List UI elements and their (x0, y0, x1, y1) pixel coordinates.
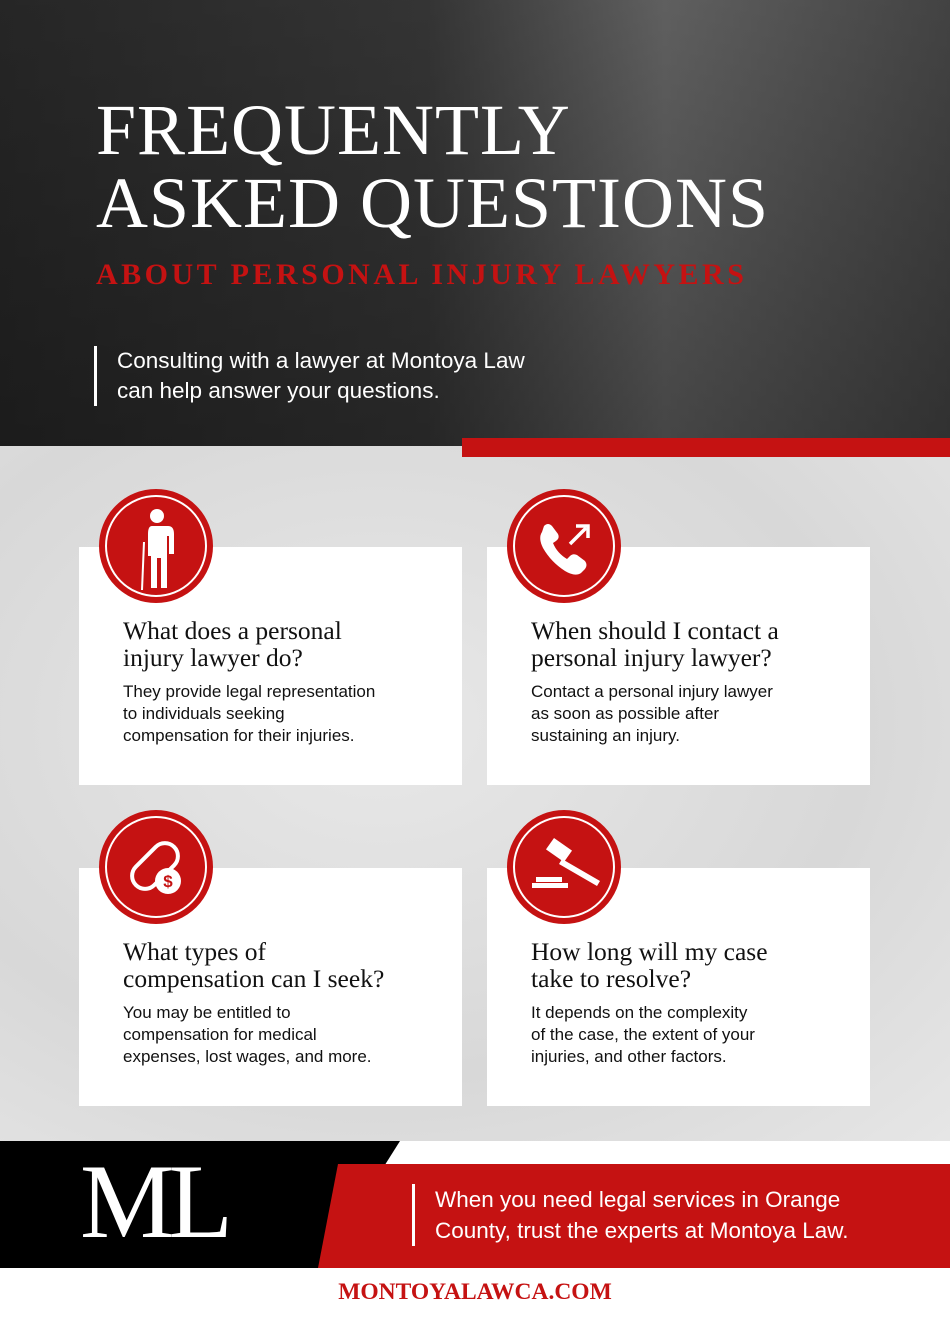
header photo background (0, 0, 950, 446)
footer black logo block (0, 1141, 400, 1268)
card 4: take to resolve? (531, 964, 691, 993)
red accent bar (462, 438, 950, 457)
icon: gavel (507, 810, 621, 924)
title (96, 90, 769, 243)
icon: pill with dollar (99, 810, 213, 924)
card 3: You may be entitled to (123, 1003, 291, 1022)
card 1: compensation for their injuries. (123, 726, 355, 745)
card 2: Contact a personal injury lawyer (531, 682, 773, 701)
card 4: How long will my case (531, 937, 768, 966)
footer red band (318, 1164, 950, 1268)
title: ASKED QUESTIONS (96, 163, 769, 243)
card 1: What does a personal (123, 616, 342, 645)
card 2: as soon as possible after (531, 704, 719, 723)
body background (0, 446, 950, 1141)
card 2: personal injury lawyer? (531, 643, 772, 672)
card 4: injuries, and other factors. (531, 1047, 727, 1066)
title: FREQUENTLY (96, 90, 571, 170)
card 3: What types of (123, 937, 266, 966)
intro text: can help answer your questions. (117, 378, 440, 403)
card 3: expenses, lost wages, and more. (123, 1047, 372, 1066)
icon: pill with dollar: $ (163, 872, 173, 891)
card 3: compensation for medical (123, 1025, 317, 1044)
card 4 (487, 868, 870, 1106)
card 3 (79, 868, 462, 1106)
card 1 (79, 547, 462, 785)
card 3: compensation can I seek? (123, 964, 384, 993)
card 1: injury lawyer do? (123, 643, 303, 672)
icon: injured person (99, 489, 213, 603)
subtitle: ABOUT PERSONAL INJURY LAWYERS (96, 258, 747, 291)
card 2 (487, 547, 870, 785)
card 2: When should I contact a (531, 616, 779, 645)
card 4: It depends on the complexity (531, 1003, 747, 1022)
card 1: to individuals seeking (123, 704, 285, 723)
card 2: sustaining an injury. (531, 726, 680, 745)
card 4: of the case, the extent of your (531, 1025, 755, 1044)
footer text (412, 1184, 849, 1246)
footer text: County, trust the experts at Montoya Law. (435, 1218, 849, 1243)
icon: phone (507, 489, 621, 603)
card 1: They provide legal representation (123, 682, 375, 701)
website url: MONTOYALAWCA.COM (338, 1279, 612, 1305)
logo ML: ML (80, 1143, 227, 1260)
intro text (94, 346, 525, 406)
footer text: When you need legal services in Orange (435, 1187, 840, 1212)
intro text: Consulting with a lawyer at Montoya Law (117, 348, 525, 373)
